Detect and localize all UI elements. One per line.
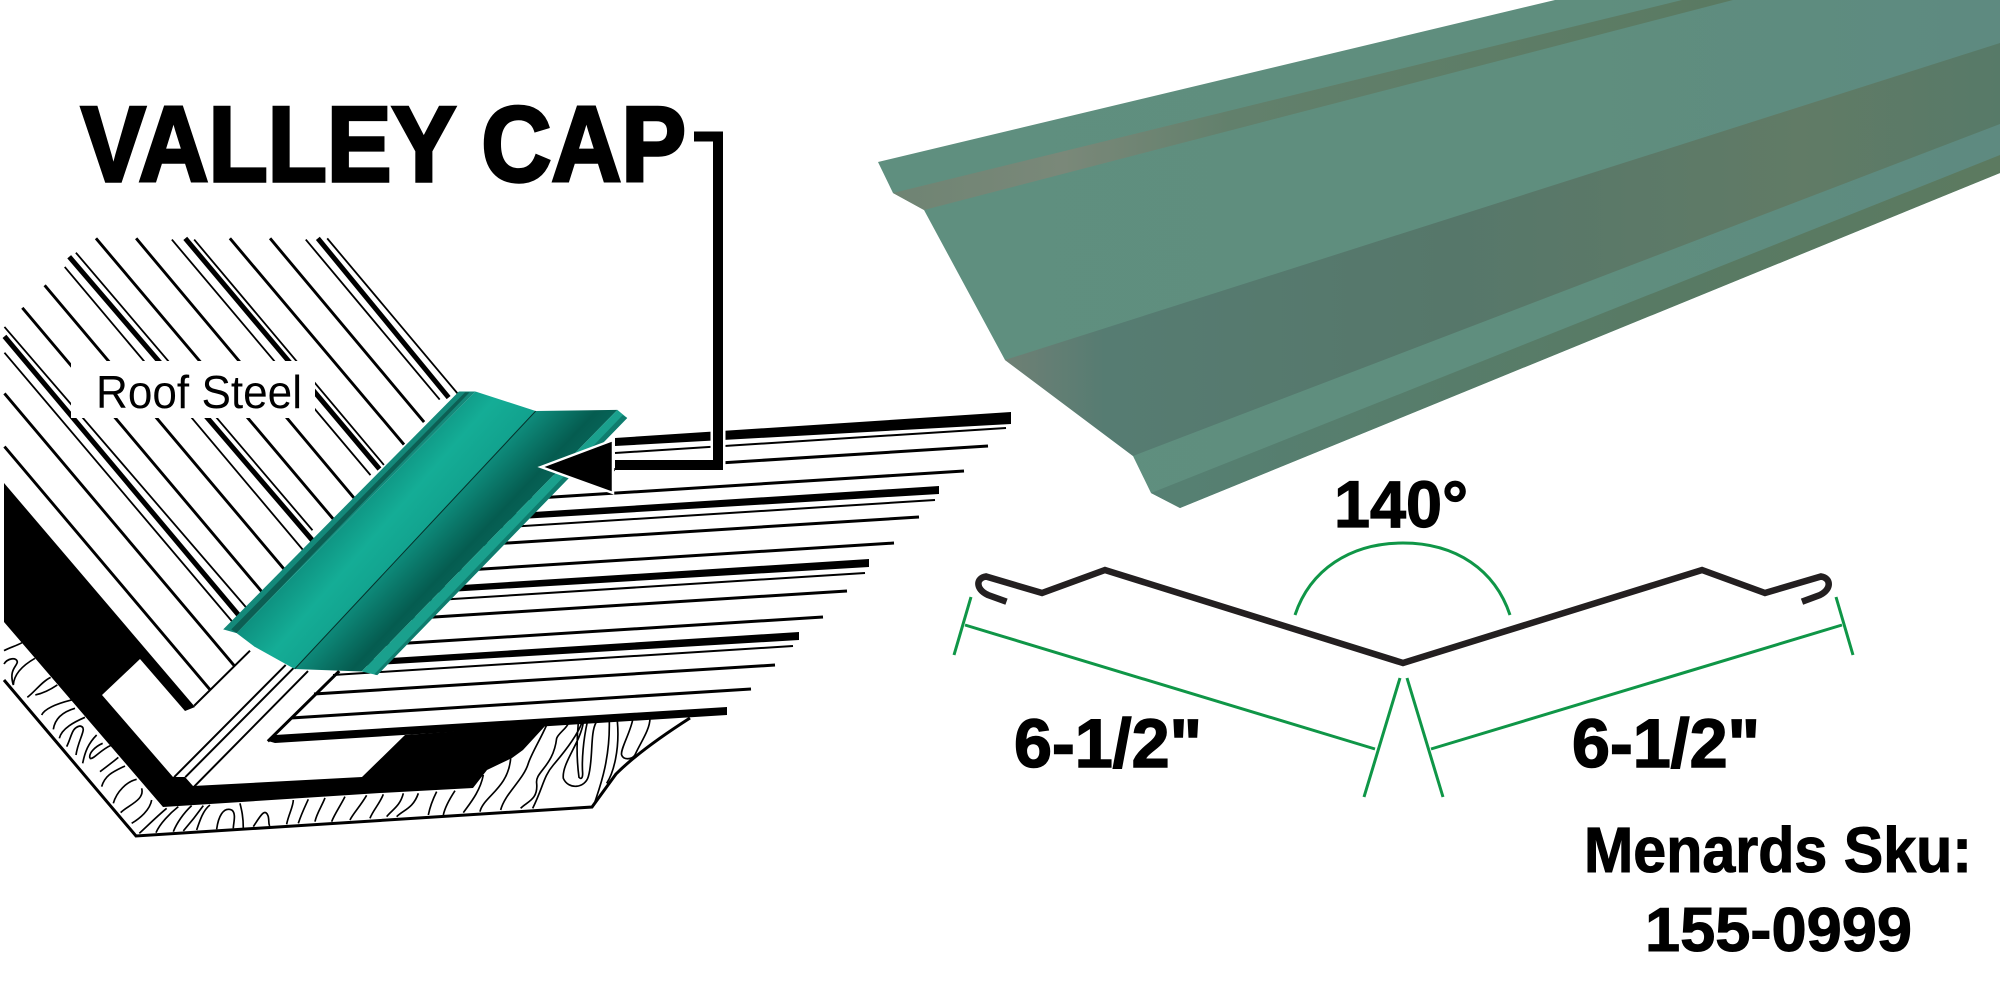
valley cap flashing in teal — [223, 391, 627, 675]
black underlayment — [4, 483, 546, 807]
right dimension label: 6-1/2" — [1572, 705, 1760, 782]
valley cap cross-section profile — [978, 570, 1829, 663]
wood deck outline and grain — [4, 643, 690, 836]
angle label: 140° — [1334, 467, 1468, 541]
right dimension line — [1407, 597, 1853, 797]
product photo: green valley cap panel — [878, 0, 2000, 508]
SKU number: 155-0999 — [1645, 896, 1912, 965]
title: VALLEY CAP — [81, 84, 686, 204]
left dimension label: 6-1/2" — [1014, 705, 1202, 782]
roof illustration — [4, 238, 1011, 836]
Roof Steel label: Roof Steel — [96, 366, 302, 418]
roof steel panel lines: right slope — [268, 412, 1011, 743]
callout arrow from title to valley cap — [541, 130, 718, 493]
SKU label line 1: Menards Sku: — [1584, 814, 1972, 886]
left dimension line — [954, 597, 1400, 797]
roof steel panel lines: left slope — [4, 238, 458, 787]
angle arc — [1295, 543, 1510, 615]
